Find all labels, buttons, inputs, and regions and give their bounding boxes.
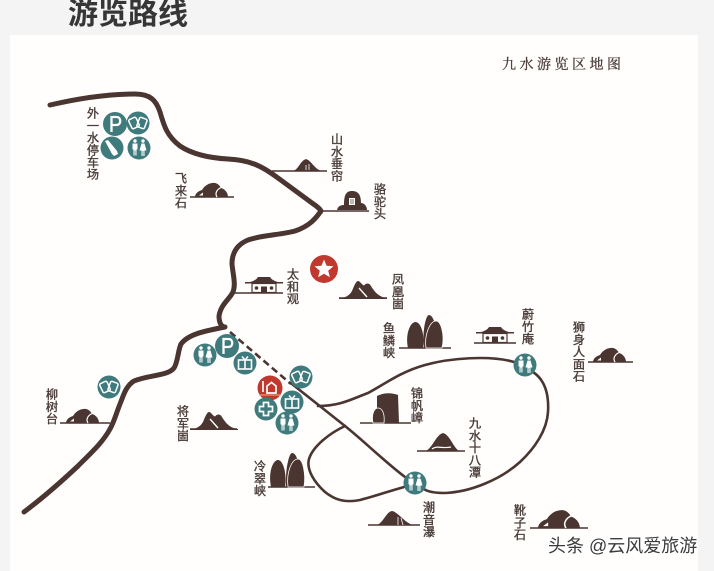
dashed entrance path bbox=[230, 332, 291, 384]
icon: tickets centre bbox=[290, 366, 312, 388]
icon: parking north bbox=[103, 112, 127, 136]
icon: parking centre bbox=[215, 334, 239, 358]
landmark: 骆驼头: 骆驼头 bbox=[372, 182, 386, 220]
landmark: 山水垂帘 bbox=[293, 133, 343, 182]
landmark: 飞来石 bbox=[173, 172, 228, 209]
landmark: 九水十八潭: 九水十八潭 bbox=[467, 417, 481, 478]
icon: toilets south bbox=[276, 412, 298, 434]
landmark: 狮身人面石 bbox=[571, 321, 626, 382]
landmark: 将军崮 bbox=[175, 405, 238, 442]
map heading: 九水游览区地图 bbox=[502, 56, 624, 73]
landmark: 冷翠峡: 冷翠峡 bbox=[252, 460, 266, 497]
landmark: 潮音瀑 bbox=[377, 500, 435, 538]
landmark: 柳树台: 柳树台 bbox=[44, 388, 58, 425]
landmark: 锦帆嶂 bbox=[372, 387, 423, 424]
icon: tickets west bbox=[98, 376, 120, 398]
landmark: 凤凰崮 bbox=[339, 273, 404, 310]
watermark: 头条 @云风爱旅游 bbox=[548, 536, 697, 556]
landmark: 飞来石: 飞来石 bbox=[173, 172, 187, 209]
landmark: 柳树台 bbox=[44, 388, 99, 425]
lower road and loops bbox=[292, 384, 405, 477]
landmark: 靴子石 bbox=[512, 504, 580, 541]
landmark: 潮音瀑: 潮音瀑 bbox=[421, 500, 435, 538]
icon: gift south bbox=[280, 390, 304, 414]
landmark: 山水垂帘: 山水垂帘 bbox=[329, 133, 343, 182]
landmark: 锦帆嶂: 锦帆嶂 bbox=[409, 387, 423, 424]
icon: toilets east bbox=[514, 354, 536, 376]
landmark: 蔚竹庵: 蔚竹庵 bbox=[520, 308, 534, 345]
landmark: 骆驼头 bbox=[337, 182, 386, 220]
landmark: 外一水停车场: 外一水停车场 bbox=[85, 107, 99, 180]
icon: tickets north bbox=[126, 112, 150, 134]
icon: first aid bbox=[254, 398, 278, 420]
icon: visitor centre bbox=[258, 376, 282, 400]
landmark: 靴子石: 靴子石 bbox=[512, 504, 526, 541]
landmark: 将军崮: 将军崮 bbox=[175, 405, 189, 442]
landmark: 鱼鳞峡 bbox=[381, 315, 443, 359]
icon: gift centre bbox=[234, 352, 256, 374]
landmark: 狮身人面石: 狮身人面石 bbox=[571, 321, 585, 382]
icon: phone north bbox=[100, 136, 124, 160]
main road bbox=[24, 94, 548, 512]
landmark: 凤凰崮: 凤凰崮 bbox=[390, 273, 404, 310]
icon: toilets north bbox=[128, 136, 150, 160]
star marker bbox=[310, 255, 338, 283]
landmark: 九水十八潭 bbox=[426, 417, 481, 478]
icon: toilets lower bbox=[404, 472, 426, 494]
landmark: 太和观: 太和观 bbox=[285, 267, 299, 305]
landmark: 冷翠峡 bbox=[252, 453, 305, 497]
landmark: 鱼鳞峡: 鱼鳞峡 bbox=[381, 322, 395, 359]
landmark: 蔚竹庵 bbox=[476, 308, 534, 345]
icon: toilets centre bbox=[194, 344, 216, 366]
landmark: 太和观 bbox=[245, 267, 299, 305]
landmark baselines bbox=[60, 171, 633, 528]
